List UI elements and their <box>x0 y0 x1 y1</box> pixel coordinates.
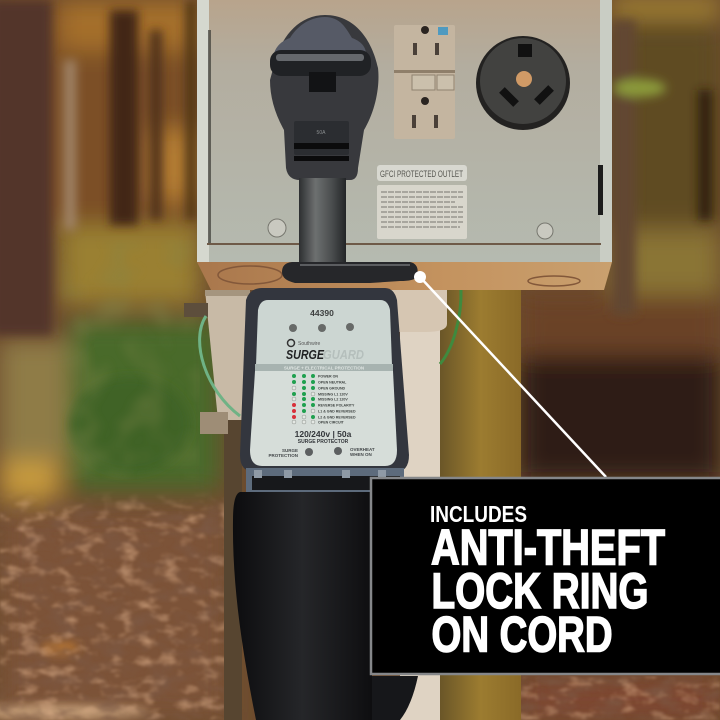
indicator labels: L2 & GND REVERSED <box>318 416 356 420</box>
surge protector: WHEN ON <box>350 452 372 457</box>
surge protector: Southwire <box>298 341 320 347</box>
surge protector <box>240 288 409 472</box>
surge protector: OVERHEAT <box>350 447 375 452</box>
plug on cord: 50A <box>317 130 326 136</box>
indicator labels <box>318 374 356 424</box>
surge protector: PROTECTION <box>268 453 298 458</box>
callout pointer line <box>414 271 606 477</box>
lock ring <box>282 262 418 283</box>
surge protector: GUARD <box>323 348 364 362</box>
surge protector: SURGE PROTECTOR <box>298 439 349 445</box>
indicator labels: OPEN NEUTRAL <box>318 380 347 384</box>
indicator lights <box>292 374 315 424</box>
indicator labels: L1 & GND REVERSED <box>318 410 356 414</box>
callout panel <box>371 478 720 674</box>
callout headline <box>431 520 665 662</box>
wooden post <box>224 285 521 720</box>
screws <box>268 219 286 237</box>
callout eyebrow: INCLUDES <box>430 501 527 527</box>
GFCI outlet <box>394 25 455 139</box>
green wires <box>200 288 461 416</box>
surge protector: SURGE <box>282 448 298 453</box>
indicator labels: OPEN GROUND <box>318 386 346 390</box>
leaf texture <box>0 490 240 720</box>
box labels: GFCI PROTECTED OUTLET <box>380 169 463 180</box>
surge protector: 120/240v | 50a <box>295 429 352 439</box>
surge protector: SURGE + ELECTRICAL PROTECTION <box>284 366 364 370</box>
model number: 44390 <box>310 308 334 318</box>
callout headline: ANTI-THEFT <box>431 520 665 576</box>
plug on cord <box>270 15 378 263</box>
indicator labels: MISSING L2 120V <box>318 398 348 402</box>
indicator labels: MISSING L1 120V <box>318 392 348 396</box>
indicator labels: REVERSE POLARITY <box>318 404 355 408</box>
white conduit pipe <box>184 280 447 720</box>
indicator labels: POWER ON <box>318 374 338 378</box>
indicator labels: OPEN CIRCUIT <box>318 420 345 424</box>
RV receptacle <box>476 36 570 130</box>
surge guard logo: SURGE <box>286 348 325 362</box>
callout headline: ON CORD <box>432 606 612 662</box>
box labels <box>377 165 467 239</box>
protector weather cover <box>233 468 418 720</box>
callout headline: LOCK RING <box>432 563 648 619</box>
electrical box <box>197 0 612 290</box>
